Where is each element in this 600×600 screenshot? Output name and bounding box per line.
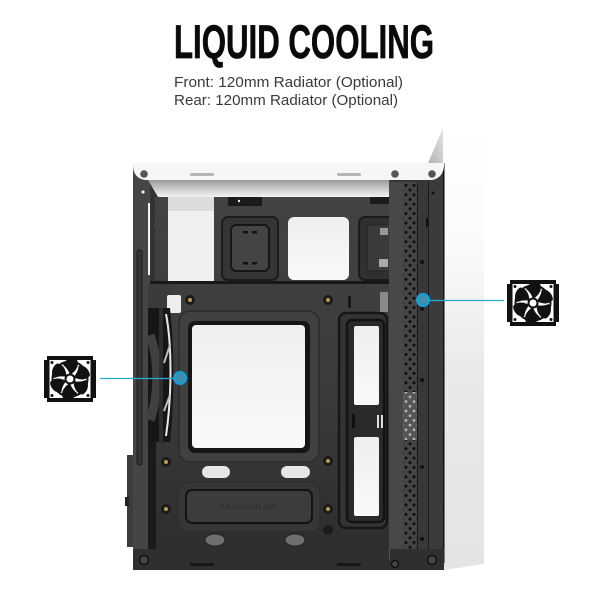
feet <box>205 534 305 546</box>
icon: radiator fan left <box>44 356 96 402</box>
motherboard tray <box>148 197 393 550</box>
callout: front radiator <box>417 280 559 326</box>
text block: radiator support: Rear: 120mm Radiator (Optional) <box>174 92 398 109</box>
title: LIQUID COOLING <box>174 15 434 68</box>
black strip below fan <box>148 440 156 550</box>
rear fan <box>148 308 174 443</box>
computer case <box>125 128 484 570</box>
icon: radiator fan right <box>507 280 559 326</box>
top window <box>288 217 349 280</box>
right embossed square <box>359 217 393 280</box>
callout: rear radiator <box>44 356 186 402</box>
left tab <box>127 455 134 547</box>
text block: radiator support: Front: 120mm Radiator (Optional) <box>174 74 403 91</box>
bottom embossed plate: MAGNIUM <box>220 505 276 511</box>
side slots <box>339 313 387 528</box>
text block: radiator support <box>174 74 403 109</box>
bottom rail <box>133 549 444 570</box>
oval slots <box>202 466 310 478</box>
front rail perforated <box>389 163 444 563</box>
case interior <box>133 165 444 570</box>
left rail <box>133 165 170 570</box>
top white bar <box>133 163 444 180</box>
main window <box>179 311 319 462</box>
bottom embossed plate <box>178 482 320 532</box>
under-top shadow <box>148 180 389 197</box>
embossed square <box>222 217 278 280</box>
standoffs <box>161 295 333 535</box>
white side panel <box>428 128 484 570</box>
